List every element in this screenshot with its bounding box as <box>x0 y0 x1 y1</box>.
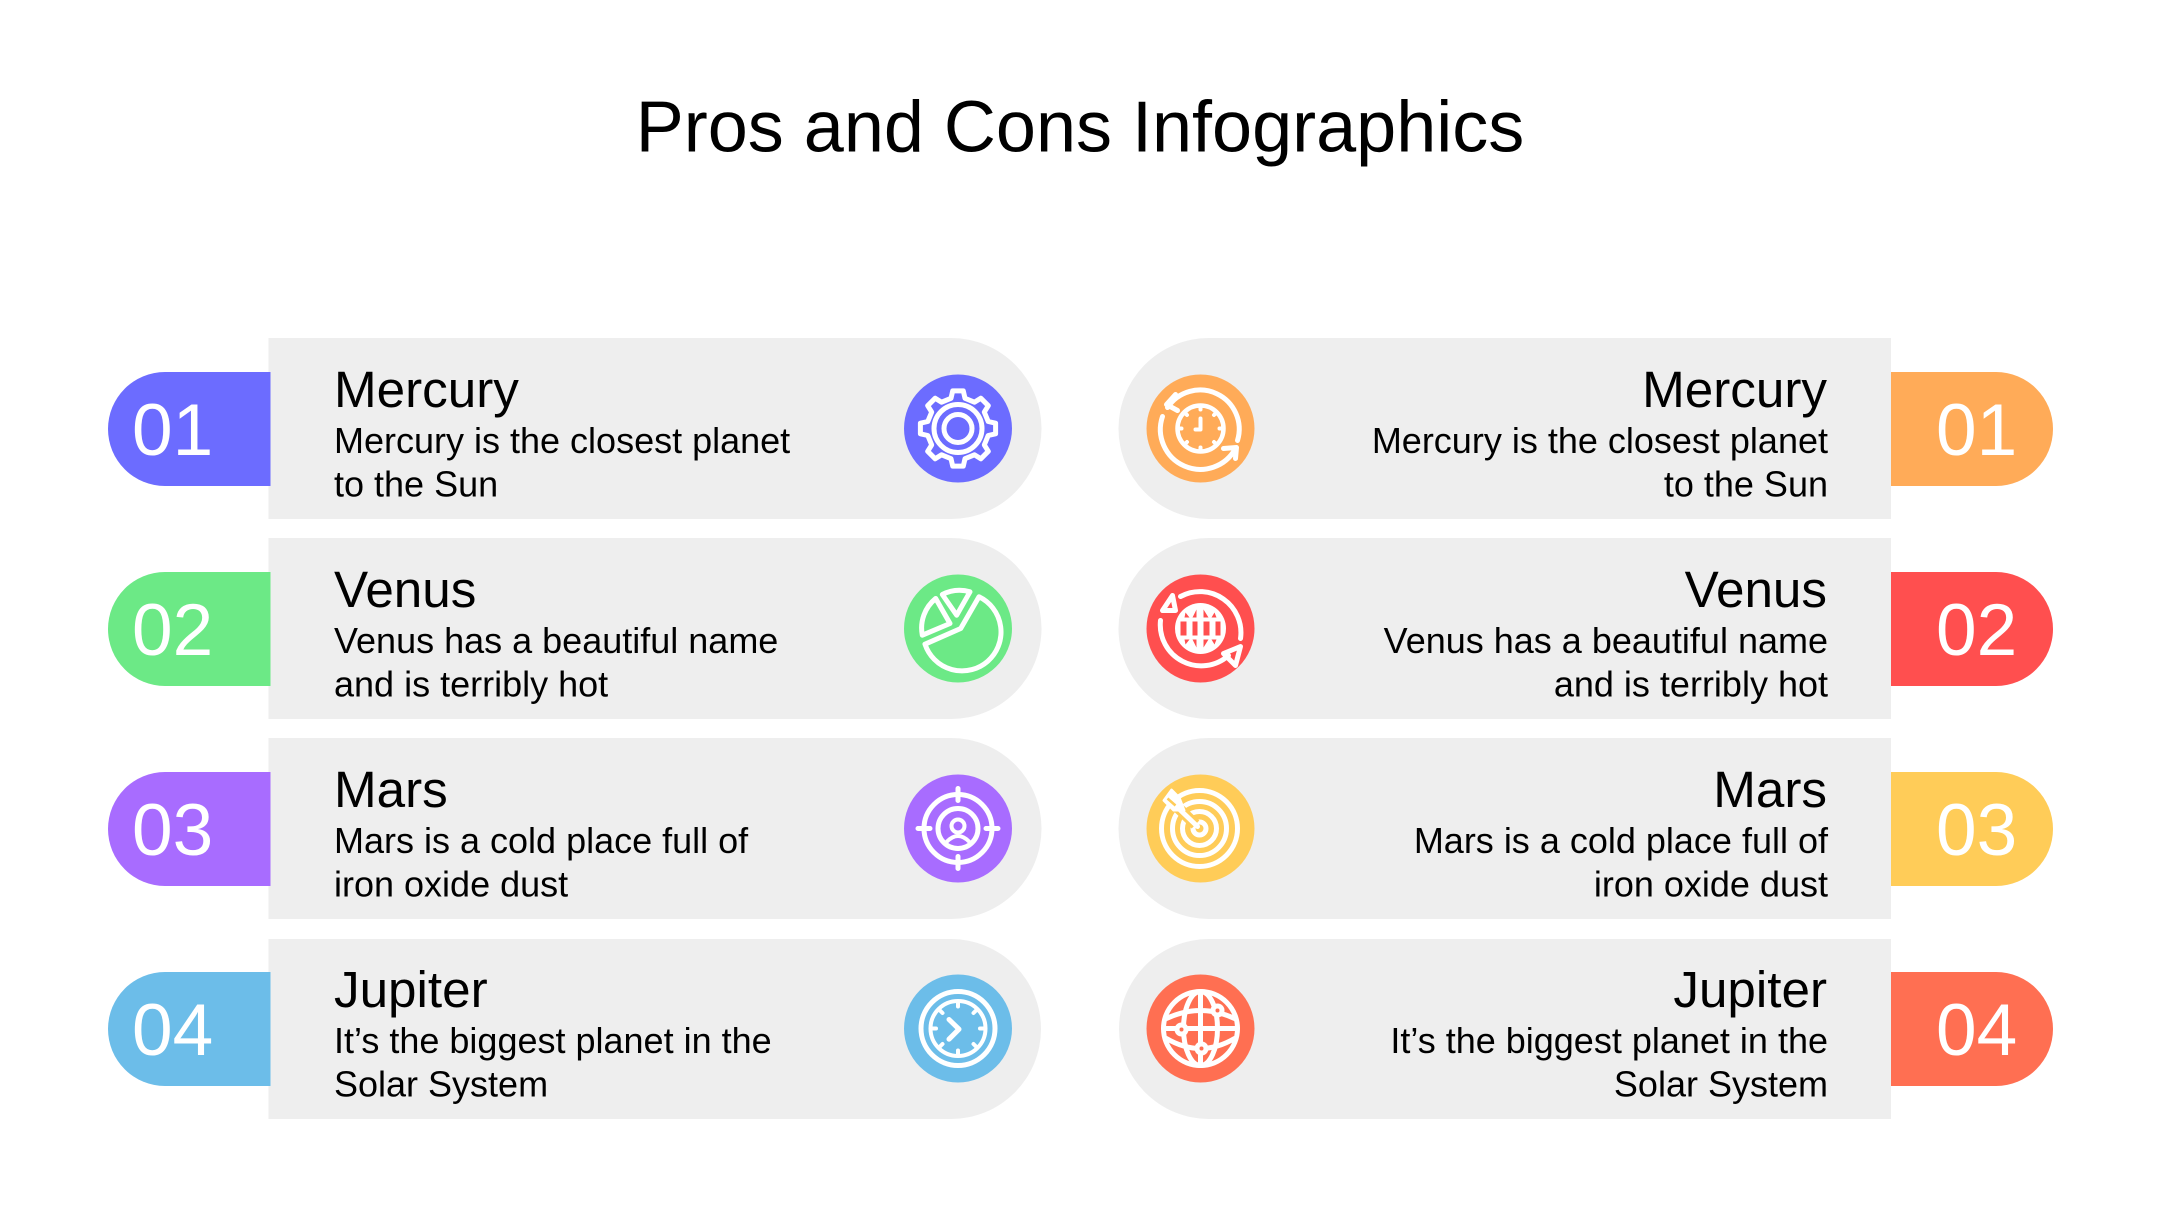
icon: gear <box>904 374 1012 482</box>
description Venus: Venus has a beautiful name <box>1384 620 1828 661</box>
icon: globe with rotating arrows <box>1146 574 1254 682</box>
number 04: 04 <box>1936 990 2017 1071</box>
description Mercury: to the Sun <box>334 463 498 504</box>
description Mercury: Mercury is the closest planet <box>1372 420 1828 461</box>
number pill 04 <box>108 972 270 1086</box>
heading Mars: Mars <box>334 761 448 818</box>
pros row 3: Mars <box>108 738 1042 919</box>
number pill 04 <box>1891 972 2053 1086</box>
description Venus: Venus has a beautiful name <box>334 620 778 661</box>
panel background <box>268 338 1042 519</box>
number pill 02 <box>108 572 270 686</box>
pros row 4: Jupiter <box>108 939 1041 1119</box>
heading Jupiter: Jupiter <box>1673 961 1827 1018</box>
description Venus: and is terribly hot <box>1554 663 1828 704</box>
description Jupiter: Solar System <box>334 1063 548 1104</box>
pros row 2: Venus <box>108 538 1042 719</box>
cons row 4: Jupiter <box>1119 939 2053 1119</box>
number pill 01 <box>1891 372 2053 486</box>
icon: clock with rotating arrows <box>1146 374 1254 482</box>
number 04: 04 <box>132 990 213 1071</box>
description Venus: and is terribly hot <box>334 663 608 704</box>
number pill 02 <box>1891 572 2053 686</box>
panel background <box>268 939 1041 1119</box>
panel background <box>268 538 1042 719</box>
heading Venus: Venus <box>1685 561 1827 618</box>
icon: clock chevron <box>904 974 1012 1082</box>
heading Mercury: Mercury <box>1642 361 1827 418</box>
number pill 03 <box>1891 772 2053 886</box>
description Mars: Mars is a cold place full of <box>1414 820 1829 861</box>
description Mars: iron oxide dust <box>334 863 568 904</box>
pros row 1: Mercury <box>108 338 1042 519</box>
description Jupiter: It’s the biggest planet in the <box>1390 1020 1828 1061</box>
number 02: 02 <box>1936 590 2017 671</box>
heading Mars: Mars <box>1713 761 1827 818</box>
description Mercury: to the Sun <box>1664 463 1828 504</box>
heading Jupiter: Jupiter <box>334 961 488 1018</box>
panel background <box>268 738 1042 919</box>
cons row 2: Venus <box>1118 538 2053 719</box>
icon: pie chart <box>904 574 1012 682</box>
panel background <box>1118 338 1891 519</box>
icon: dartboard with arrow <box>1146 774 1254 882</box>
panel background <box>1119 939 1891 1119</box>
heading Mercury: Mercury <box>334 361 519 418</box>
number 01: 01 <box>1936 390 2017 471</box>
description Jupiter: Solar System <box>1614 1063 1828 1104</box>
panel background <box>1118 538 1891 719</box>
number 02: 02 <box>132 590 213 671</box>
icon: target person <box>904 774 1012 882</box>
cons row 1: Mercury <box>1118 338 2053 519</box>
number 03: 03 <box>132 790 213 871</box>
description Mercury: Mercury is the closest planet <box>334 420 790 461</box>
title: Pros and Cons Infographics <box>636 88 1524 168</box>
number pill 01 <box>108 372 270 486</box>
number pill 03 <box>108 772 270 886</box>
cons row 3: Mars <box>1118 738 2053 919</box>
number 01: 01 <box>132 390 213 471</box>
description Mars: Mars is a cold place full of <box>334 820 749 861</box>
description Mars: iron oxide dust <box>1594 863 1828 904</box>
panel background <box>1118 738 1891 919</box>
description Jupiter: It’s the biggest planet in the <box>334 1020 772 1061</box>
heading Venus: Venus <box>334 561 476 618</box>
icon: world globe <box>1146 974 1254 1082</box>
number 03: 03 <box>1936 790 2017 871</box>
